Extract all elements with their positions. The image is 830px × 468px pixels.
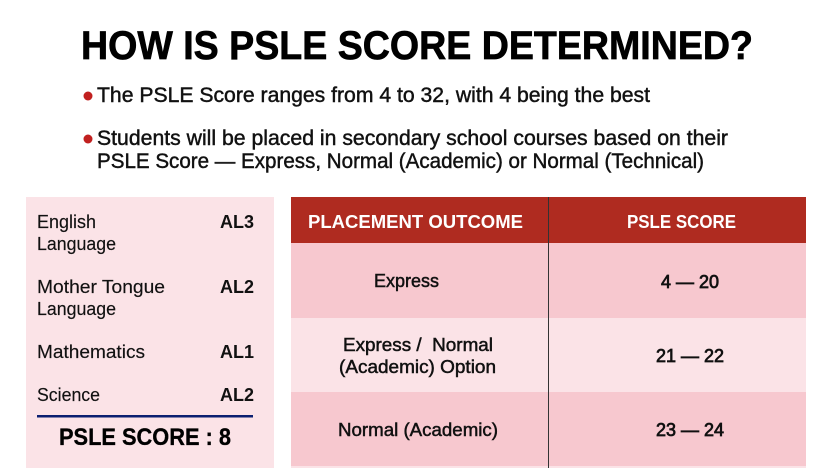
table header: PSLE SCORE (627, 211, 736, 232)
subject: Mother Tongue Language: Language (37, 298, 116, 319)
bullet list (84, 84, 728, 173)
row: Express / Normal (Academic) Option: 21 — 22 (656, 345, 724, 366)
title: HOW IS PSLE SCORE DETERMINED? (81, 24, 753, 68)
table: placement outcomes (291, 197, 806, 468)
row: Express / Normal (Academic) Option: Express / Normal (343, 334, 493, 355)
bullet: score range: The PSLE Score ranges from 4 to 32, with 4 being the best (97, 84, 650, 107)
subject: Mathematics: AL1 (220, 342, 254, 362)
subject: Science: AL2 (220, 385, 254, 405)
total score: PSLE SCORE : 8 (59, 424, 231, 451)
row: Normal (Academic) (291, 392, 806, 466)
table header: PLACEMENT OUTCOME (308, 211, 523, 232)
subject: English Language: AL3 (220, 212, 254, 232)
bullet: secondary school courses: PSLE Score — Express, Normal (Academic) or Normal (Technical) (97, 150, 704, 173)
row: Express (291, 243, 806, 318)
bullet: secondary school courses (84, 127, 728, 173)
row: Express / Normal (Academic) Option: (Academic) Option (339, 356, 496, 377)
subject: Science (37, 384, 254, 405)
row: Express: Express (374, 270, 439, 291)
panel: example score calculation (26, 197, 274, 468)
table header (291, 197, 806, 243)
subject: Mathematics (37, 341, 254, 362)
subject: Science: Science (37, 384, 100, 405)
subject: English Language: Language (37, 233, 116, 254)
subject: Mother Tongue Language: Mother Tongue (37, 276, 165, 297)
subject: English Language (37, 211, 254, 254)
bullet: secondary school courses: Students will be placed in secondary school courses based on their (97, 127, 728, 150)
subject: Mathematics: Mathematics (37, 341, 145, 362)
subject: English Language: English (37, 211, 96, 232)
row: Express: 4 — 20 (661, 271, 719, 292)
subject: Mother Tongue Language (37, 276, 254, 319)
subject: Mother Tongue Language: AL2 (220, 277, 254, 297)
row: Normal (Academic): Normal (Academic) (338, 419, 498, 440)
row: Normal (Academic): 23 — 24 (656, 419, 724, 440)
row: Express / Normal (Academic) Option (291, 318, 806, 392)
